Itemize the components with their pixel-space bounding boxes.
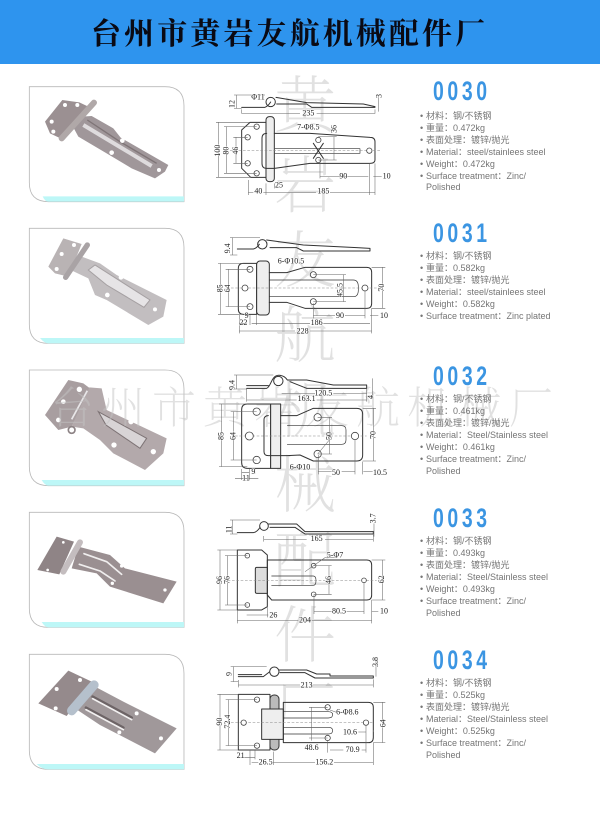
dimension labels 0032: 163.1 — [298, 394, 316, 403]
watermark: vertical company name: 航 — [274, 286, 336, 375]
model number 0031: 0031 — [433, 218, 491, 248]
model number 0033: 0033 — [433, 503, 491, 533]
spec block 0031 — [420, 218, 551, 321]
specification list 0032: • — [420, 394, 423, 404]
dimension labels 0030: 3 — [375, 94, 384, 98]
specification list 0030: Polished — [426, 182, 461, 192]
header banner — [0, 0, 600, 64]
watermark: horizontal company name: 台州市黄岩友航机械厂 — [50, 372, 560, 436]
dimension labels 0030: 10 — [383, 171, 391, 180]
specification list 0032: • — [420, 418, 423, 428]
dimension labels 0032 — [216, 380, 387, 483]
specification list 0030: 重量：0.472kg — [426, 122, 485, 133]
specification list 0034: 重量：0.525kg — [426, 689, 485, 700]
specification list 0033: Material：Steel/Stainless steel — [426, 572, 548, 582]
hinge image 0031 — [48, 238, 167, 325]
dimension labels 0032: 4 — [366, 395, 375, 399]
model number 0034: 0034 — [433, 645, 491, 675]
specification list 0033: • — [420, 536, 423, 546]
technical drawing 0034 — [215, 657, 387, 767]
specification list 0033: 表面处理：镀锌/抛光 — [426, 559, 510, 570]
specification list 0031: • — [420, 299, 423, 309]
specification list 0031 — [420, 250, 551, 321]
hinge image 0030 — [45, 100, 168, 178]
dimension labels 0034: 10.6 — [343, 727, 357, 736]
dimension labels 0033: 5-Φ7 — [327, 551, 343, 560]
specification list 0031: • — [420, 251, 423, 261]
dimension labels 0032: 70 — [368, 431, 377, 439]
specification list 0030: 材料：钢/不锈钢 — [426, 110, 492, 121]
specification list 0034: 材料：钢/不锈钢 — [426, 677, 492, 688]
specification list 0030: • — [420, 135, 423, 145]
watermark: vertical company name: 厂 — [274, 661, 336, 750]
specification list 0034: Material：Steel/Stainless steel — [426, 714, 548, 724]
dimension labels 0034: 64 — [378, 719, 387, 727]
dimension labels 0034: 70.9 — [346, 745, 360, 754]
dimension labels 0030 — [213, 92, 391, 195]
dimension labels 0032: 10.5 — [373, 468, 387, 477]
dimension labels 0030: 7-Φ8.5 — [297, 123, 320, 132]
dimension labels 0032: 50 — [325, 432, 334, 440]
specification list 0032: • — [420, 454, 423, 464]
dimension labels 0032: 50 — [332, 468, 340, 477]
panel: photo of hinge 0034 — [29, 654, 184, 769]
specification list 0030: • — [420, 171, 423, 181]
dimension labels 0031: 9 — [245, 311, 249, 320]
specification list 0034: 表面处理：镀锌/抛光 — [426, 701, 510, 712]
dimension labels 0030: 40 — [254, 186, 262, 195]
specification list 0033 — [420, 535, 548, 618]
dimension labels 0033: 10 — [380, 607, 388, 616]
dimension labels 0033 — [215, 513, 388, 625]
dimension labels 0031: 22 — [239, 318, 247, 327]
dimension labels 0032: 85 — [216, 432, 225, 440]
model number 0030: 0030 — [433, 76, 491, 106]
specification list 0031: • — [420, 275, 423, 285]
specification list 0033: Polished — [426, 608, 461, 618]
dimension labels 0030: 36 — [329, 125, 338, 133]
dimension labels 0031: 45.5 — [335, 283, 344, 297]
dimension labels 0033: 46 — [324, 576, 333, 584]
dimension labels 0031: 64 — [223, 284, 232, 292]
specification list 0032: • — [420, 430, 423, 440]
dimension labels 0033: 62 — [377, 575, 386, 583]
specification list 0033: • — [420, 548, 423, 558]
spec block 0034 — [420, 645, 548, 760]
watermark: vertical company name: 岩 — [274, 136, 336, 225]
specification list 0032: Weight：0.461kg — [426, 442, 495, 452]
dimension labels 0034: 3.8 — [371, 657, 380, 667]
specification list 0031: Material：steel/stainlees steel — [426, 287, 546, 297]
dimension labels 0033: 96 — [215, 576, 224, 584]
watermark: vertical company name: 友 — [274, 211, 336, 300]
specification list 0034: • — [420, 690, 423, 700]
dimension labels 0033: 204 — [299, 616, 311, 625]
dimension labels 0034 — [215, 657, 387, 767]
specification list 0034: Polished — [426, 750, 461, 760]
dimension labels 0033: 165 — [311, 534, 323, 543]
specification list 0034: Weight：0.525kg — [426, 726, 495, 736]
dimension labels 0034: 90 — [215, 718, 224, 726]
dimension labels 0034: 213 — [301, 681, 313, 690]
specification list 0033: • — [420, 560, 423, 570]
dimension labels 0030: 46 — [231, 147, 240, 155]
panel: photo of hinge 0033 — [29, 512, 184, 627]
specification list 0030: • — [420, 147, 423, 157]
dimension labels 0030: 185 — [317, 186, 329, 195]
specification list 0034: • — [420, 678, 423, 688]
specification list 0030: • — [420, 111, 423, 121]
dimension labels 0031: 90 — [336, 311, 344, 320]
specification list 0030: Material：steel/stainlees steel — [426, 147, 546, 157]
dimension labels 0033: 3.7 — [369, 513, 378, 523]
specification list 0031: • — [420, 287, 423, 297]
specification list 0031: Weight：0.582kg — [426, 299, 495, 309]
specification list 0032: 表面处理：镀锌/抛光 — [426, 417, 510, 428]
specification list 0032: Material：Steel/Stainless steel — [426, 430, 548, 440]
dimension labels 0032: 64 — [228, 432, 237, 440]
specification list 0033: Surface treatment：Zinc/ — [426, 596, 527, 606]
dimension labels 0031: 228 — [297, 326, 309, 335]
specification list 0033: • — [420, 596, 423, 606]
watermark: vertical company name: 机 — [274, 361, 336, 450]
specification list 0033: • — [420, 584, 423, 594]
specification list 0034: • — [420, 738, 423, 748]
specification list 0030: • — [420, 159, 423, 169]
spec block 0033 — [420, 503, 548, 618]
panel: photo of hinge 0030 — [29, 87, 184, 202]
dimension labels 0030: 90 — [339, 171, 347, 180]
specification list 0033: 材料：钢/不锈钢 — [426, 535, 492, 546]
hinge image 0033 — [37, 537, 177, 603]
watermark: vertical company name: 配 — [274, 511, 336, 600]
dimension labels 0031: 70 — [377, 284, 386, 292]
technical drawing 0032 — [216, 375, 387, 483]
specification list 0032: • — [420, 406, 423, 416]
specification list 0030: Weight：0.472kg — [426, 159, 495, 169]
specification list 0034: • — [420, 726, 423, 736]
title: 台州市黄岩友航机械配件厂 — [91, 9, 488, 53]
dimension labels 0031: 9.4 — [223, 243, 232, 253]
dimension labels 0033: 80.5 — [332, 607, 346, 616]
hinge image 0034 — [38, 671, 177, 753]
specification list 0032: Surface treatment：Zinc/ — [426, 454, 527, 464]
dimension labels 0033: 26 — [269, 610, 277, 619]
dimension labels 0034: 48.6 — [305, 743, 319, 752]
watermark: vertical company name — [274, 56, 337, 750]
specification list 0031: • — [420, 311, 423, 321]
dimension labels 0030: 25 — [275, 180, 283, 189]
dimension labels 0030: Φ11 — [251, 92, 265, 101]
dimension labels 0032: 11 — [242, 474, 250, 483]
specification list 0033: 重量：0.493kg — [426, 547, 485, 558]
technical drawing 0033 — [215, 513, 388, 625]
specification list 0030: Surface treatment：Zinc/ — [426, 171, 527, 181]
dimension labels 0031: 85 — [216, 284, 225, 292]
dimension labels 0032: 120.5 — [314, 389, 332, 398]
specification list 0034 — [420, 677, 548, 760]
specification list 0034: • — [420, 714, 423, 724]
panel: photo of hinge 0031 — [29, 228, 184, 343]
dimension labels 0034: 26.5 — [259, 758, 273, 767]
dimension labels 0031: 6-Φ10.5 — [278, 256, 304, 265]
specification list 0032: Polished — [426, 466, 461, 476]
specification list 0030 — [420, 110, 546, 192]
dimension labels 0032: 9.4 — [227, 380, 236, 390]
dimension labels 0034: 72.4 — [223, 715, 232, 729]
specification list 0030: • — [420, 123, 423, 133]
dimension labels 0031: 10 — [380, 311, 388, 320]
dimension labels 0033: 76 — [222, 576, 231, 584]
specification list 0031: Surface treatment：Zinc plated — [426, 311, 551, 321]
technical drawing 0031 — [216, 238, 388, 335]
dimension labels 0032: 6-Φ10 — [290, 463, 310, 472]
spec block 0030 — [420, 76, 546, 192]
specification list 0034: Surface treatment：Zinc/ — [426, 738, 527, 748]
dimension labels 0031: 186 — [311, 318, 323, 327]
specification list 0031: 重量：0.582kg — [426, 262, 485, 273]
dimension labels 0034: 9 — [224, 672, 233, 676]
model number 0032: 0032 — [433, 361, 491, 391]
specification list 0031: • — [420, 263, 423, 273]
dimension labels 0030: 12 — [227, 100, 236, 108]
dimension labels 0034: 6-Φ8.6 — [336, 707, 359, 716]
specification list 0032: 材料：钢/不锈钢 — [426, 393, 492, 404]
panel: photo of hinge 0032 — [29, 370, 184, 486]
dimension labels 0030: 235 — [302, 108, 314, 117]
dimension labels 0032: 9 — [251, 467, 255, 476]
specification list 0033: Weight：0.493kg — [426, 584, 495, 594]
watermark: vertical company name: 件 — [274, 586, 336, 675]
dimension labels 0031 — [216, 243, 388, 335]
specification list 0031: 表面处理：镀锌/抛光 — [426, 274, 510, 285]
specification list 0033: • — [420, 572, 423, 582]
specification list 0031: 材料：钢/不锈钢 — [426, 250, 492, 261]
specification list 0032: • — [420, 442, 423, 452]
specification list 0030: 表面处理：镀锌/抛光 — [426, 134, 510, 145]
spec block 0032 — [420, 361, 548, 476]
dimension labels 0030: 80 — [222, 147, 231, 155]
hinge image 0032 — [45, 380, 167, 470]
watermark: vertical company name: 械 — [274, 436, 336, 525]
specification list 0034: • — [420, 702, 423, 712]
dimension labels 0033: 11 — [224, 525, 233, 533]
specification list 0032 — [420, 393, 548, 476]
watermark: vertical company name: 黄 — [274, 56, 337, 145]
dimension labels 0034: 21 — [237, 751, 245, 760]
dimension labels 0030: 100 — [213, 145, 222, 157]
technical drawing 0030 — [213, 92, 391, 195]
specification list 0032: 重量：0.461kg — [426, 405, 485, 416]
dimension labels 0034: 156.2 — [315, 758, 333, 767]
